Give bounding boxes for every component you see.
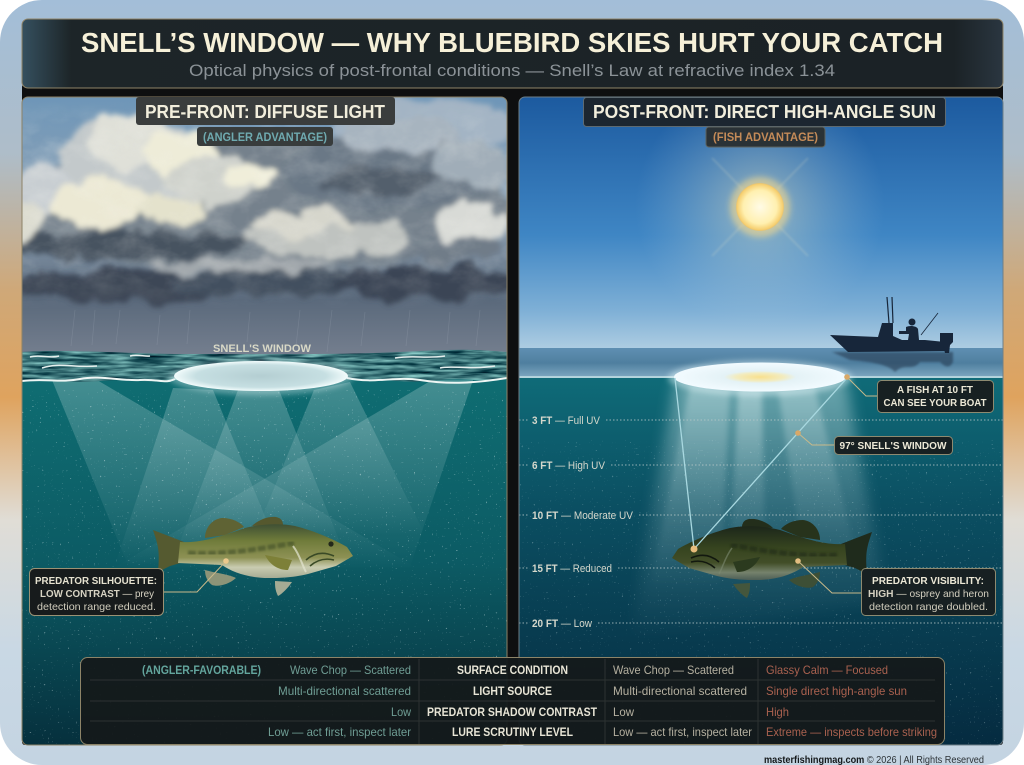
depth scale: 15 FT — Reduced	[532, 563, 612, 575]
callout: predator silhouette: detection range reduced.	[37, 601, 156, 613]
callout: predator silhouette: PREDATOR SILHOUETTE:	[35, 575, 157, 587]
column: angler-favorable values: Wave Chop — Scattered	[290, 663, 411, 677]
cloud texture	[22, 113, 506, 297]
panel border: post-front	[519, 97, 1003, 745]
column: pre-front values: Low — act first, inspect later	[613, 725, 752, 739]
choppy surface waves	[22, 350, 506, 384]
column: post-front values: Glassy Calm — Focused	[766, 663, 888, 677]
callout: boat visibility: A FISH AT 10 FT	[897, 384, 974, 396]
underwater	[519, 378, 1003, 745]
comparison table	[80, 658, 944, 744]
heading: pre-front: PRE-FRONT: DIFFUSE LIGHT	[145, 102, 385, 122]
light beams	[52, 380, 473, 570]
storm sky	[22, 97, 507, 357]
badge: angler advantage	[197, 127, 333, 146]
boat silhouette	[830, 297, 953, 353]
heading: post-front: POST-FRONT: DIRECT HIGH-ANGLE SUN	[593, 102, 936, 122]
panel border: pre-front	[22, 97, 507, 745]
column: angler-favorable values: Multi-directional scattered	[278, 684, 411, 698]
panel: pre-front	[0, 97, 525, 745]
header panel	[22, 19, 1003, 88]
column: factors: SURFACE CONDITION	[457, 663, 568, 677]
column: pre-front values: Wave Chop — Scattered	[613, 663, 734, 677]
column: factors: PREDATOR SHADOW CONTRAST	[427, 705, 598, 719]
depth scale	[519, 415, 1003, 630]
calm far water	[519, 348, 1003, 378]
boat reflection	[832, 352, 953, 372]
callout: predator visibility: HIGH — osprey and heron	[868, 588, 989, 600]
column: factors: LURE SCRUTINY LEVEL	[452, 725, 573, 739]
depth scale: 3 FT — Full UV	[532, 415, 601, 427]
snell's window angle lines	[675, 378, 847, 552]
callout: predator silhouette	[30, 558, 229, 616]
column: pre-front values	[613, 663, 752, 739]
callout: predator visibility: detection range doubled.	[869, 601, 988, 613]
particles	[22, 390, 507, 745]
column: angler-favorable values	[142, 663, 411, 739]
depth scale: 6 FT — High UV	[532, 460, 606, 472]
column: post-front values	[766, 663, 937, 739]
badge: fish advantage	[706, 127, 825, 147]
underwater	[22, 378, 507, 745]
callout: boat visibility: CAN SEE YOUR BOAT	[884, 397, 987, 409]
callout: boat visibility	[844, 374, 994, 412]
column: pre-front values: Low	[613, 705, 634, 719]
light cone and shafts	[642, 378, 880, 608]
snell's window ellipse	[668, 360, 852, 396]
clear sky	[519, 97, 1003, 349]
label: snell's window: SNELL'S WINDOW	[213, 343, 312, 355]
callout: 97 degree window	[795, 430, 952, 454]
callout: predator visibility: PREDATOR VISIBILITY:	[872, 575, 984, 587]
column: pre-front values: Multi-directional scattered	[613, 684, 747, 698]
column: post-front values: Single direct high-angle sun	[766, 684, 907, 698]
badge: fish advantage: (FISH ADVANTAGE)	[713, 130, 818, 144]
column: factors	[427, 663, 598, 739]
column: angler-favorable values: Low	[391, 705, 411, 719]
surface line	[519, 376, 1003, 378]
panel: post-front	[519, 82, 1003, 745]
fish: largemouth bass	[672, 519, 872, 598]
snell's window ellipse	[169, 359, 353, 395]
sun	[652, 127, 869, 302]
heading: pre-front	[136, 97, 395, 125]
fish: largemouth bass	[153, 517, 353, 596]
title: SNELL’S WINDOW — WHY BLUEBIRD SKIES HURT YOUR CATCH	[81, 27, 943, 58]
column: angler-favorable values: Low — act first, inspect later	[268, 725, 411, 739]
rain	[71, 310, 480, 352]
column: post-front values: High	[766, 705, 789, 719]
column: post-front values: Extreme — inspects before striking	[766, 725, 937, 739]
depth scale: 20 FT — Low	[532, 618, 592, 630]
heading: post-front	[584, 98, 946, 126]
particles	[519, 440, 1003, 745]
callout: predator silhouette: LOW CONTRAST — prey	[40, 588, 155, 600]
callout: predator visibility	[795, 558, 996, 616]
callout: 97 degree window: 97° SNELL'S WINDOW	[840, 440, 947, 452]
column: angler-favorable values: (ANGLER-FAVORABLE)	[142, 663, 261, 677]
column: factors: LIGHT SOURCE	[473, 684, 552, 698]
storm clouds	[0, 97, 525, 303]
subtitle: Optical physics of post-frontal conditions — Snell’s Law at refractive index 1.34	[189, 61, 835, 80]
badge: angler advantage: (ANGLER ADVANTAGE)	[203, 130, 327, 144]
depth scale: 10 FT — Moderate UV	[532, 510, 634, 522]
